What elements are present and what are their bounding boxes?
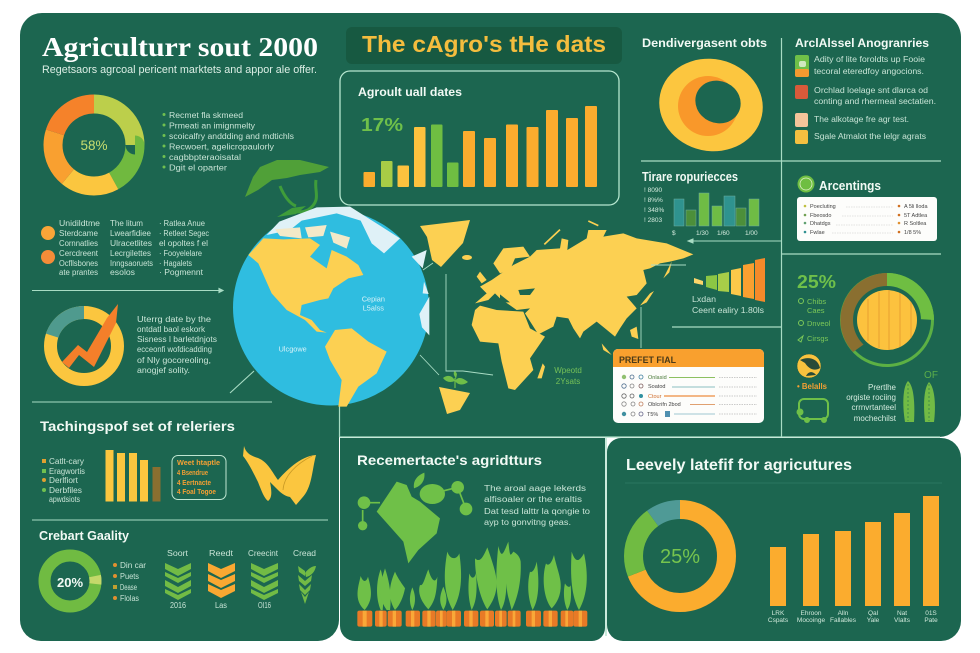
panel heading: Recemertacte's agridtturs [357, 452, 542, 468]
bar labels: Ehroon [801, 610, 822, 617]
text block: ayp to gonvitng geas. [484, 518, 571, 527]
legend [798, 297, 831, 343]
globe: Ulcgowe [279, 345, 307, 354]
wedge chart caption: Ceent ealiry 1.80ls [692, 306, 764, 315]
divider [32, 519, 328, 521]
panel: icon list [795, 38, 936, 144]
bar labels: Qal [868, 610, 879, 617]
axis labels: ! 348% [644, 207, 664, 214]
text columns: Ocfllsbones [59, 259, 98, 268]
eurasia [475, 230, 693, 338]
callout box: 4 Foal Togoe [177, 487, 216, 496]
panel heading: Tirare ropuriecces [642, 170, 738, 184]
chevron icons with labels: Soort [167, 549, 189, 558]
icon: red tag [795, 85, 808, 99]
icon: badge [798, 176, 814, 192]
chevron icons with labels: Cread [293, 549, 316, 558]
text columns: Cercdreent [59, 249, 99, 258]
table rows: T5% [647, 412, 658, 418]
white card: Fwlae [810, 230, 825, 236]
axis labels [644, 187, 758, 237]
table rows: Ctour [648, 394, 662, 400]
south america [325, 328, 387, 407]
arrow line [688, 239, 781, 243]
text columns: Lwearfidiee [110, 229, 152, 238]
text block: Uterrg date by the [137, 315, 212, 324]
donut chart [634, 510, 726, 602]
text columns: Unidildtme [59, 219, 101, 228]
ring chart [651, 49, 771, 161]
text block: alfisoaler or the eraltis [484, 495, 582, 504]
white card: Dhatdgs [810, 221, 831, 227]
bars [674, 193, 759, 226]
label: OF [924, 370, 938, 381]
white card: R Soltlea [904, 221, 927, 227]
legend: Chibs [807, 297, 826, 306]
bar chart [106, 450, 160, 502]
bullet list: Prmeati an imignmelty [169, 122, 255, 130]
white card: A 5li lloda [904, 204, 928, 210]
axis labels: 1/30 [696, 230, 709, 237]
text columns: esolos [110, 268, 135, 277]
stat: 25% [797, 272, 836, 292]
north america [248, 238, 363, 333]
text block: The aroal aage lekerds [484, 484, 586, 493]
panel heading: Dendivergasent obts [642, 36, 767, 50]
callout box: 4 Eertnacte [177, 478, 211, 487]
panel: bottom centre [357, 452, 591, 627]
text block [484, 484, 591, 527]
bullet list: Recmet fla skmeed [169, 111, 243, 120]
panel heading: Leevely latefif for agricutures [626, 457, 852, 474]
icon: yellow leaf shape [243, 446, 316, 505]
item text: conting and rhermeal sectatien. [814, 97, 936, 106]
panel: bar chart top [340, 71, 619, 205]
text columns: Ulracetlites [110, 239, 152, 248]
panel: arcentings [797, 176, 937, 241]
donut chart [840, 273, 934, 366]
text columns: Lecrgilettes [110, 249, 151, 258]
item text: tecoral eteredfoy angocions. [814, 67, 924, 76]
panel: 25% ring [797, 272, 938, 423]
white card: 1/8 5% [904, 230, 921, 236]
greenland [420, 220, 470, 267]
axis labels: $ [672, 230, 676, 237]
bar labels: 01S [925, 610, 937, 617]
bar labels: LRK [772, 610, 785, 617]
wedge chart caption: Lxdan [692, 295, 716, 304]
text block: orgiste rociing [846, 393, 896, 402]
icon: sprout on island [439, 371, 470, 414]
panel: small bar chart [642, 170, 781, 243]
donut chart: 20% [44, 556, 96, 606]
text columns: · Retleet Segec [159, 229, 209, 238]
bar labels: Alln [838, 610, 849, 617]
bar labels: Vlalts [894, 617, 911, 624]
legend: Flolas [120, 594, 139, 603]
donut value: 58% [80, 138, 108, 153]
text block: anogjef solity. [137, 366, 190, 375]
bullet list [162, 111, 294, 172]
item text: Orchlad loelage snt dlarca od [814, 86, 928, 95]
ring with rising arrow [50, 304, 118, 380]
scandinavia and islands [477, 247, 672, 378]
legend: Din car [120, 561, 146, 570]
bar labels [768, 610, 938, 624]
world map [420, 220, 693, 414]
donut value: 20% [57, 575, 83, 590]
callout box: 4 Bsendrue [177, 468, 208, 477]
africa [472, 306, 545, 390]
icon: orange dots [41, 226, 55, 264]
icon: globe badge [797, 354, 821, 378]
text block: Dat tesd lalttr la qongie to [484, 507, 591, 516]
chevron icons with labels: 2016 [170, 601, 186, 610]
legend [42, 457, 85, 504]
table rows [622, 375, 757, 418]
item text: The alkotage fre agr test. [814, 115, 909, 124]
stat: 17% [361, 115, 403, 135]
icon: green orange tag [795, 55, 809, 77]
novaya zemlya [544, 221, 598, 244]
bullet list: cagbbpteraoisatal [169, 153, 241, 162]
text columns [59, 219, 209, 277]
title banner: The cAgro's tHe dats [362, 31, 606, 57]
callout box: Weet htaptle [177, 458, 220, 467]
legend: Caes [807, 306, 825, 315]
text block: of Nly gocoreoling, [137, 356, 211, 365]
text columns: Inngsaoruets [110, 259, 153, 268]
legend: Dease [120, 583, 137, 592]
panel: divergent ring [642, 36, 771, 161]
text block: mochechilst [854, 414, 897, 423]
item text: Adity of lite foroldts up Fooie [814, 55, 926, 64]
text block: ecceonfi wofdicadding [137, 345, 212, 354]
globe: L5alss [363, 304, 384, 313]
icon: tractor outline [798, 399, 828, 422]
inland seas [500, 288, 535, 302]
legend [113, 561, 146, 603]
ocean labels: Cepian [362, 295, 385, 304]
text block: ontdatl baol eskork [137, 325, 206, 334]
white card [797, 197, 937, 241]
axis labels: ! 8090 [644, 187, 662, 194]
donut value: 25% [660, 546, 700, 568]
chevron icons with labels [165, 549, 316, 610]
legend: Puets [120, 572, 139, 581]
white card: Poecluting [810, 204, 836, 210]
legend: Derbfiles [49, 486, 82, 495]
table rows: Onlasid [648, 375, 667, 381]
axis labels: ! 2803 [644, 217, 662, 224]
legend: Eragwortis [49, 467, 85, 476]
pointer line [32, 371, 272, 402]
legend: Cirsgs [807, 334, 829, 343]
subtitle: Regetsaors agrcoal pericent marktets and appor ale offer. [42, 64, 317, 76]
table rows: Oblcrifn 2bod [648, 402, 681, 408]
panel heading: Arcentings [819, 179, 881, 193]
bullet list: Recwoert, agelicropaulorly [169, 142, 274, 152]
bullet list: Dgit el oparter [169, 164, 227, 172]
orange crescent [678, 76, 738, 136]
chevron icons with labels: OI16 [258, 601, 271, 610]
donut chart: 58% [53, 104, 135, 186]
callout box [172, 456, 226, 500]
chevron icons with labels: Reedt [209, 549, 234, 558]
bar labels: Cspats [768, 617, 789, 624]
map label: Wpeotd [554, 366, 582, 375]
bar labels: Nat [897, 610, 907, 617]
bar labels: Yale [867, 617, 880, 624]
iceland [462, 255, 472, 260]
text columns: · Hagalets [159, 259, 192, 268]
text block [137, 315, 217, 375]
item text: Sgale Atmalot the lelgr agrats [814, 132, 926, 141]
bar labels: Mocoinge [797, 617, 825, 624]
arctic islands [275, 225, 350, 249]
connector lines [420, 263, 686, 375]
text block [846, 383, 897, 423]
text columns: · Pogmennt [159, 268, 204, 277]
crop row [357, 542, 587, 627]
text columns: Cornnatlies [59, 239, 98, 248]
text block: Sisness l barletdnjots [137, 335, 217, 344]
ice cap [267, 207, 400, 253]
icon: yellow tag [795, 130, 808, 144]
text columns: · Ratlea Anue [159, 219, 206, 228]
axis labels: ! 8%% [644, 197, 663, 204]
heading: Crebart Gaality [39, 528, 130, 543]
text block: Prertlhe [868, 383, 897, 392]
table heading: PREFET FIAL [619, 355, 676, 365]
arrow divider [32, 288, 223, 292]
white card: 5T Adtlea [904, 213, 928, 219]
wedge bar chart [694, 258, 765, 302]
icon: peach tag [795, 113, 808, 127]
icon: network map [358, 473, 472, 563]
title: Agriculturr sout 2000 [42, 32, 318, 62]
yellow striped circle [857, 290, 917, 350]
table rows: Soatod [648, 384, 665, 390]
chevron icons with labels: Las [215, 601, 227, 610]
map label line 2: 2Ysats [556, 377, 580, 386]
panel: left overview [32, 32, 328, 610]
panel heading: ArclAlssel Anogranries [795, 38, 929, 50]
east ice [412, 250, 429, 335]
bar chart [770, 496, 939, 606]
text columns: The litum [110, 219, 143, 228]
bar labels: Pate [924, 617, 938, 624]
chevron icons with labels: Creecint [248, 549, 279, 558]
legend: Catlt-cary [49, 457, 84, 466]
globe [233, 207, 429, 407]
bullet list: scoicalfry anddding and mdtichls [169, 132, 294, 141]
icon label: • Belalls [797, 382, 828, 391]
icon: wheat [903, 381, 935, 422]
panel heading: Agroult uall dates [358, 87, 462, 99]
text block: crrnvrtanteel [852, 403, 896, 412]
title banner [346, 27, 622, 64]
text columns: ate prantes [59, 268, 98, 277]
ring hole [688, 73, 748, 131]
heading: Tachingspof set of releriers [40, 418, 235, 434]
axis labels: 1/60 [717, 230, 730, 237]
white card: Fbeosdo [810, 213, 831, 219]
panel: bottom right [625, 457, 942, 624]
bar labels: Fallables [830, 617, 857, 624]
legend: apwdsiots [49, 495, 80, 504]
legend: Derlfiort [49, 476, 79, 485]
axis labels: 1/00 [745, 230, 758, 237]
text columns: Sterdcame [59, 229, 99, 238]
text columns: el opoltes f el [159, 239, 208, 248]
bars [364, 106, 597, 187]
text columns: · Fooyelelare [159, 249, 203, 258]
icon: tree [245, 160, 329, 217]
panel: preret fial table [613, 349, 764, 423]
legend: Dnveol [807, 319, 831, 328]
